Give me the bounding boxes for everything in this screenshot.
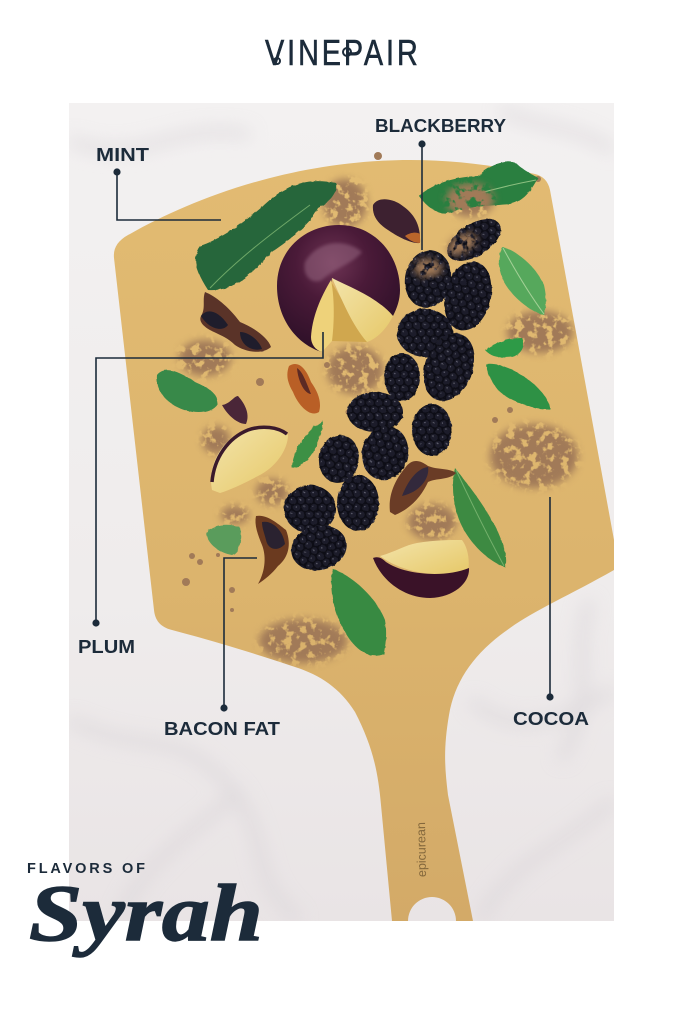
logo: VinePair: VINEPAIR	[265, 32, 418, 73]
callout: blackberry: BLACKBERRY	[375, 115, 507, 136]
title: Syrah: Syrah	[29, 868, 263, 958]
ingredient: blackberries	[284, 211, 508, 576]
callout: blackberry	[375, 115, 507, 250]
mint: lower leaf	[453, 468, 506, 567]
ingredient: bacon fat pieces	[200, 199, 456, 584]
photo: marble background	[69, 103, 614, 921]
mint: top-right leaf	[419, 162, 538, 214]
bacon: right piece	[390, 461, 456, 515]
mint: left leaf	[157, 370, 218, 412]
mint: large leaf	[196, 181, 336, 290]
callout: mint: MINT	[96, 144, 150, 165]
ingredient: plum slices	[211, 427, 469, 598]
ingredient: plum	[277, 225, 400, 352]
mint: bottom leaf	[331, 569, 386, 656]
callout: bacon fat: BACON FAT	[164, 718, 281, 739]
bacon: lower-left piece	[255, 516, 289, 584]
mint: small right leaf	[485, 338, 524, 357]
title block	[27, 861, 263, 958]
callout: mint	[96, 144, 221, 220]
mint: small dusted leaf	[206, 525, 241, 555]
cocoa dust on top blackberries	[414, 228, 480, 277]
callout: bacon fat	[164, 558, 281, 739]
bacon: top piece	[373, 199, 420, 243]
bacon: upper-left piece	[200, 292, 271, 352]
cocoa dust on top-right leaf	[446, 183, 494, 217]
bacon: small piece	[222, 396, 248, 424]
plum: highlight	[304, 243, 362, 281]
title: eyebrow: FLAVORS OF	[27, 861, 145, 877]
callout: cocoa: COCOA	[513, 708, 589, 729]
ingredient: mint leaves	[157, 162, 550, 656]
mint: lower right leaf	[486, 364, 550, 409]
callout: cocoa	[513, 497, 589, 729]
plum: whole fruit	[277, 225, 400, 352]
bacon: orange piece	[287, 364, 320, 414]
callout: plum: PLUM	[78, 636, 135, 657]
plum slice: left	[211, 427, 288, 493]
cocoa crumb on marble	[374, 152, 382, 160]
mint: centre sliver	[292, 421, 323, 468]
callout: plum	[78, 332, 323, 657]
plum slice: lower right	[373, 540, 469, 598]
board brand text: epicurean	[414, 822, 429, 877]
cocoa powder scatter	[179, 176, 578, 663]
mint: right leaf	[499, 247, 546, 315]
plum: cut wedge	[311, 278, 393, 352]
